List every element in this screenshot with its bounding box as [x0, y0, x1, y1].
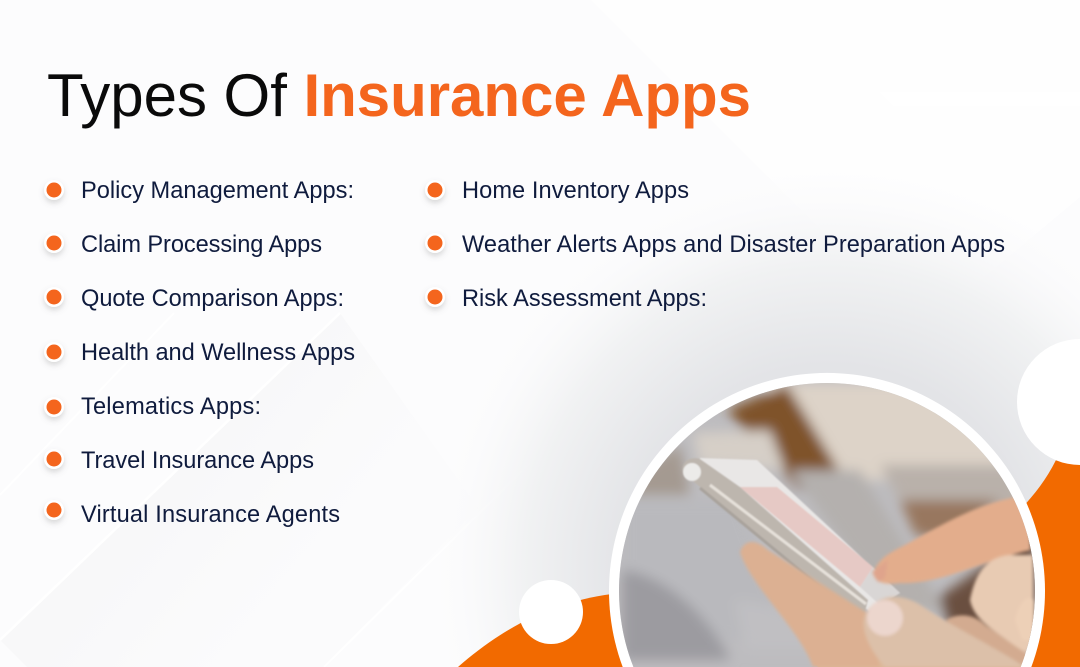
item: Policy Management Apps: Policy Management Apps:: [81, 178, 354, 204]
blurred background: [622, 383, 1035, 660]
right list: [425, 178, 1005, 312]
item: Risk Assessment Apps: Risk Assessment Apps:: [462, 286, 707, 312]
item: Telematics Apps: Telematics Apps:: [81, 394, 261, 420]
white circle: right: [1017, 339, 1080, 465]
wrist base: [810, 655, 1025, 667]
hand: [740, 495, 1034, 667]
phone: [682, 458, 900, 620]
item: Claim Processing Apps: Claim Processing Apps: [81, 232, 322, 258]
orange shape: bottom: [458, 594, 660, 667]
item: Home Inventory Apps: Home Inventory Apps: [462, 178, 689, 204]
item: Virtual Insurance Agents: Virtual Insurance Agents: [81, 502, 340, 528]
photo: hand holding phone: [609, 373, 1045, 667]
item: Weather Alerts Apps and Disaster Preparation Apps: Weather Alerts Apps and Disaster Preparation Apps: [462, 232, 1005, 258]
white circle: bottom: [519, 580, 583, 644]
title: Types Of Insurance Apps: [47, 62, 751, 129]
item: Travel Insurance Apps: Travel Insurance Apps: [81, 448, 314, 474]
orange shape: right: [1000, 460, 1080, 667]
left list: [44, 178, 355, 528]
item: Health and Wellness Apps: Health and Wellness Apps: [81, 340, 355, 366]
item: Quote Comparison Apps: Quote Comparison Apps:: [81, 286, 344, 312]
